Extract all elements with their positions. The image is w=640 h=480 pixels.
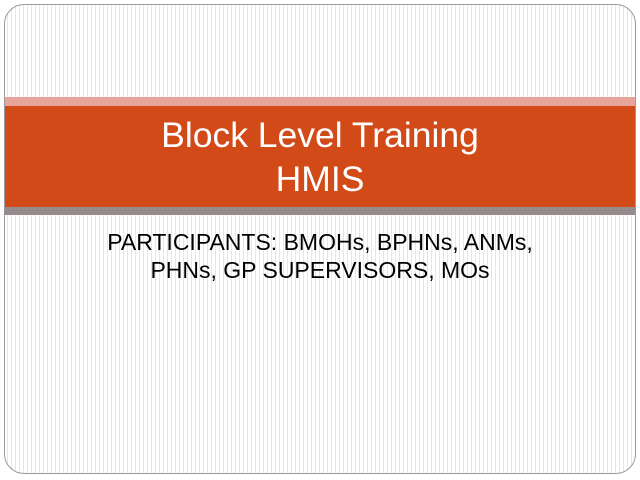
title band xyxy=(5,106,635,207)
title: Block Level Training xyxy=(161,115,479,155)
participants text xyxy=(107,229,533,283)
title: HMIS xyxy=(276,159,364,199)
title xyxy=(161,115,479,199)
gray band xyxy=(5,207,635,215)
pink band xyxy=(5,97,635,106)
participants text: PHNs, GP SUPERVISORS, MOs xyxy=(150,257,490,283)
participants text: PARTICIPANTS: BMOHs, BPHNs, ANMs, xyxy=(107,229,533,255)
